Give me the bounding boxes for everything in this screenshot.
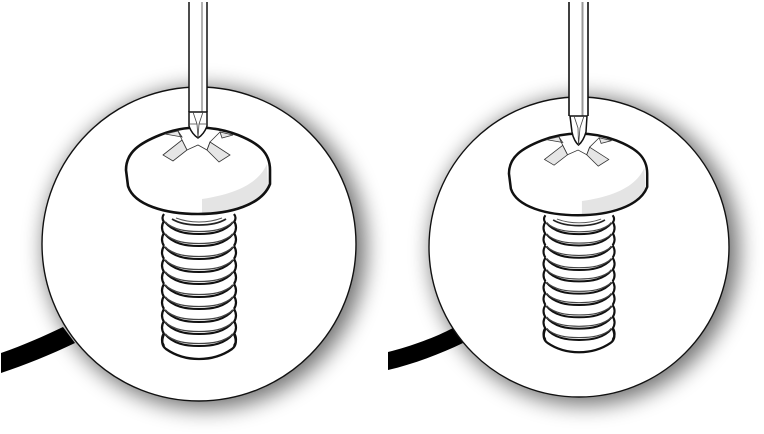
screw: left: [126, 128, 270, 359]
magnifier circle: right: [429, 97, 729, 397]
cable: right: [388, 328, 463, 370]
screwdriver: left: [189, 2, 207, 138]
magnifier circle: left: [42, 87, 356, 401]
cable: left: [1, 327, 75, 373]
screw: right: [509, 133, 647, 352]
screwdriver: right: [569, 2, 588, 145]
circle shadow: right: [431, 97, 739, 405]
circle shadow: left: [44, 87, 366, 409]
